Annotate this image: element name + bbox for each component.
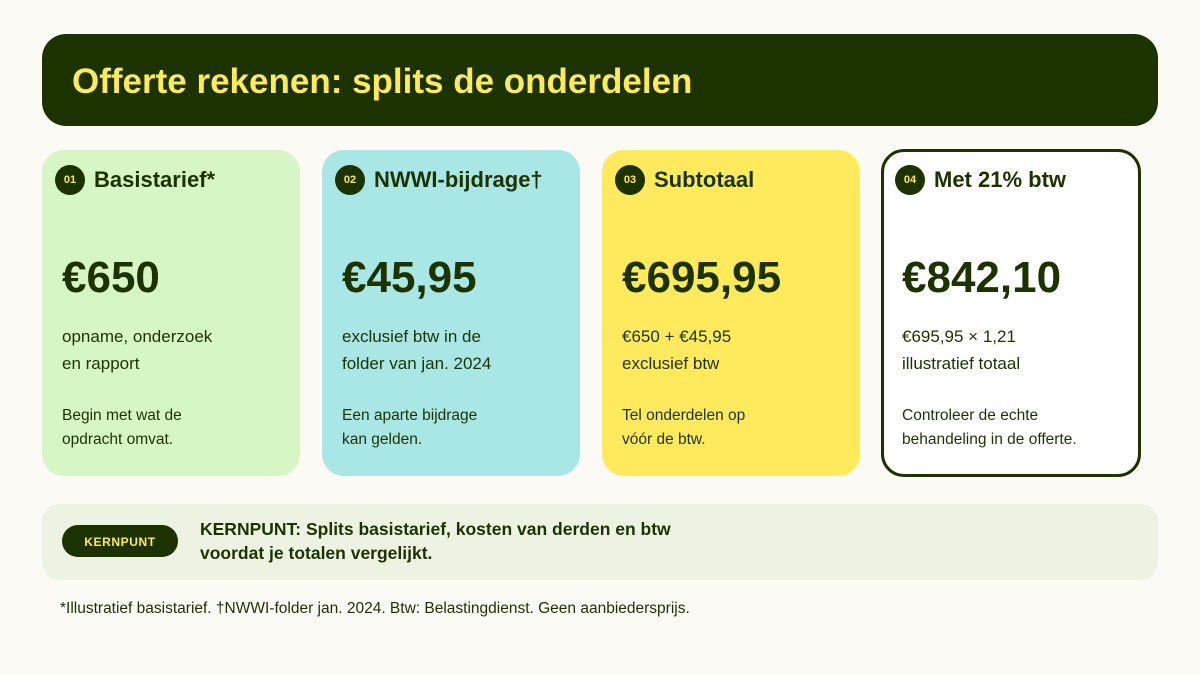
description: folder van jan. 2024 [342, 354, 491, 373]
kernpunt pill [62, 525, 178, 557]
panel: basistarief [42, 150, 300, 476]
description: €650 + €45,95 [622, 327, 731, 346]
note: Een aparte bijdrage [342, 407, 477, 424]
note: vóór de btw. [622, 431, 706, 448]
card heading: Subtotaal [654, 167, 754, 192]
note: Controleer de echte [902, 407, 1038, 424]
description: opname, onderzoek [62, 327, 212, 346]
title: Offerte rekenen: splits de onderdelen [72, 62, 692, 101]
panel: key takeaway [42, 504, 1158, 580]
description: €695,95 × 1,21 [902, 327, 1016, 346]
card heading: Basistarief* [94, 167, 215, 192]
card heading: NWWI-bijdrage† [374, 167, 543, 192]
note: opdracht omvat. [62, 431, 173, 448]
note: kan gelden. [342, 431, 422, 448]
panel: met 21% btw [881, 149, 1141, 477]
amount: €842,10 [902, 253, 1061, 302]
note [342, 407, 477, 448]
amount: €650 [62, 253, 160, 302]
card heading: Met 21% btw [934, 167, 1066, 192]
step badge 02 [335, 165, 365, 195]
step badge 02: 02 [344, 174, 356, 186]
step badge 01 [55, 165, 85, 195]
note [902, 407, 1077, 448]
step badge 03 [615, 165, 645, 195]
description [342, 327, 491, 373]
description [902, 327, 1020, 373]
step badge 01: 01 [64, 174, 76, 186]
description: illustratief totaal [902, 354, 1020, 373]
kernpunt pill: KERNPUNT [84, 535, 156, 549]
key message: voordat je totalen vergelijkt. [200, 543, 432, 563]
description [62, 327, 212, 373]
step badge 03: 03 [624, 174, 636, 186]
panel: subtotaal [602, 150, 860, 476]
description [622, 327, 731, 373]
amount: €695,95 [622, 253, 781, 302]
note: Begin met wat de [62, 407, 182, 424]
step badge 04: 04 [904, 174, 916, 186]
note: Tel onderdelen op [622, 407, 745, 424]
footnote: *Illustratief basistarief. †NWWI-folder jan. 2024. Btw: Belastingdienst. Geen aanbiedersprijs. [60, 600, 690, 617]
description: exclusief btw [622, 354, 719, 373]
key message [200, 519, 671, 563]
title banner [42, 34, 1158, 126]
step badge 04 [895, 165, 925, 195]
amount: €45,95 [342, 253, 477, 302]
panel: NWWI-bijdrage [322, 150, 580, 476]
note: behandeling in de offerte. [902, 431, 1077, 448]
key message: KERNPUNT: Splits basistarief, kosten van derden en btw [200, 519, 671, 539]
note [62, 407, 182, 448]
description: en rapport [62, 354, 140, 373]
description: exclusief btw in de [342, 327, 481, 346]
note [622, 407, 745, 448]
